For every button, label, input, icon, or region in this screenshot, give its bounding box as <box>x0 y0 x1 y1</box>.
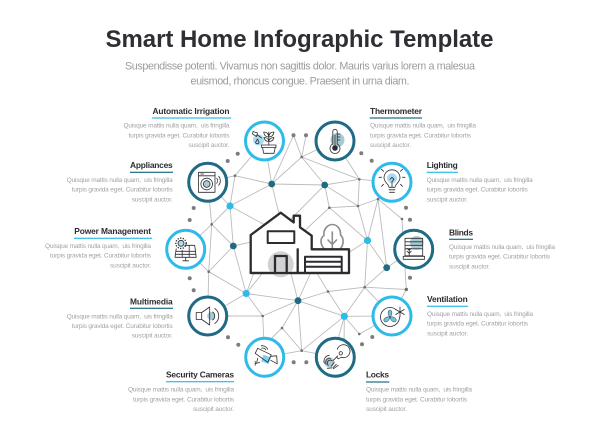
panel: appliances <box>67 160 227 203</box>
text block: turpis gravida eget. Curabitur lobortis <box>128 132 230 139</box>
panel: lighting <box>373 160 533 203</box>
underline <box>370 117 422 119</box>
tree <box>321 224 343 248</box>
icon: key and fingerprint <box>324 345 350 369</box>
door highlight <box>268 251 294 277</box>
text block: suscipit auctor. <box>188 142 230 149</box>
heading: Appliances <box>130 160 173 170</box>
text block: turpis gravida eget. Curabitur lobortis <box>72 323 173 330</box>
ring <box>316 122 354 160</box>
panel: power management <box>45 226 205 269</box>
underline <box>166 381 234 382</box>
text block <box>45 243 152 269</box>
text block: suscipit auctor. <box>366 406 407 413</box>
icon: solar panel <box>175 238 196 261</box>
text block: Quisque mattis nulla quam, uis fringilla <box>67 177 173 184</box>
text block: turpis gravida eget. Curabitur lobortis <box>370 132 472 139</box>
text block: Quisque mattis nulla quam, uis fringilla <box>366 387 472 394</box>
text block <box>124 123 230 149</box>
text block: suscipit auctor. <box>132 333 173 340</box>
ring <box>189 163 227 201</box>
panel: security cameras <box>128 338 284 413</box>
outer ring dots <box>188 133 412 364</box>
central house icon <box>251 213 349 277</box>
text block <box>427 177 533 203</box>
heading: Security Cameras <box>166 370 234 380</box>
subtitle: euismod, rhoncus congue. Praesent in urna diam. <box>190 75 410 87</box>
window <box>268 231 294 243</box>
text block <box>366 387 472 413</box>
icon: speaker <box>196 307 219 325</box>
text block: turpis gravida eget. Curabitur lobortis <box>449 254 551 261</box>
text block: turpis gravida eget. Curabitur lobortis <box>133 396 235 403</box>
ring <box>167 230 205 268</box>
text block: suscipit auctor. <box>449 263 490 270</box>
heading: Thermometer <box>370 106 423 116</box>
icon: window blinds <box>403 236 424 259</box>
underline <box>427 306 468 307</box>
heading: Lighting <box>427 160 458 170</box>
ring <box>246 338 284 376</box>
text block: Quisque mattis nulla quam, uis fringilla <box>45 243 151 250</box>
underline <box>152 117 231 119</box>
text block: turpis gravida eget. Curabitur lobortis <box>50 253 152 260</box>
ring <box>246 122 284 160</box>
text block: suscipit auctor. <box>370 142 411 149</box>
ring <box>316 338 354 376</box>
text block: turpis gravida eget. Curabitur lobortis <box>72 187 173 194</box>
heading: Power Management <box>74 226 151 236</box>
text block: Quisque mattis nulla quam, uis fringilla <box>449 244 555 251</box>
text block: suscipit auctor. <box>132 196 173 203</box>
panel: ventilation <box>373 294 533 337</box>
ring <box>395 230 433 268</box>
icon: light bulb <box>379 169 405 192</box>
underline <box>366 381 389 383</box>
underline <box>130 172 173 173</box>
panel: thermometer <box>316 106 476 160</box>
text block <box>67 313 173 340</box>
icon: security camera <box>255 346 277 365</box>
panel: locks <box>316 338 472 413</box>
title: Smart Home Infographic Template <box>106 26 494 53</box>
text block: suscipit auctor. <box>427 196 468 203</box>
subtitle <box>125 60 475 87</box>
text block: turpis gravida eget. Curabitur lobortis <box>427 187 528 194</box>
text block: Quisque mattis nulla quam, uis fringilla <box>427 177 533 184</box>
ring <box>373 297 411 335</box>
ring <box>373 163 411 201</box>
panel: automatic irrigation <box>124 106 284 160</box>
ring <box>189 297 227 335</box>
door <box>275 256 287 273</box>
network mesh <box>186 135 414 357</box>
underline <box>130 308 173 309</box>
text block: Quisque mattis nulla quam, uis fringilla <box>370 123 476 130</box>
text block: Quisque mattis nulla quam, uis fringilla <box>67 313 173 320</box>
heading: Blinds <box>449 227 473 237</box>
text block: Quisque mattis nulla quam, uis fringilla <box>427 311 533 318</box>
panel: multimedia <box>67 297 227 340</box>
text block: Quisque mattis nulla quam, uis fringilla <box>128 387 234 394</box>
network nodes <box>207 156 408 352</box>
garage door <box>305 257 342 273</box>
heading: Ventilation <box>427 294 468 304</box>
text block <box>449 244 555 270</box>
text block: suscipit auctor. <box>110 262 151 269</box>
text block <box>427 311 533 337</box>
text block: suscipit auctor. <box>427 330 468 337</box>
text block <box>370 123 476 149</box>
underline <box>74 238 152 239</box>
panel: blinds <box>395 227 555 270</box>
icon: fan and snowflake <box>380 307 405 326</box>
house body <box>251 213 349 273</box>
underline <box>449 239 473 240</box>
text block <box>67 177 173 203</box>
underline <box>427 172 458 173</box>
subtitle: Suspendisse potenti. Vivamus non sagittis dolor. Mauris varius lorem a malesua <box>125 60 475 72</box>
icon: washing machine <box>198 172 220 192</box>
text block <box>128 387 235 413</box>
heading: Automatic Irrigation <box>152 106 230 116</box>
icon: plant pot <box>252 132 276 153</box>
text block: suscipit auctor. <box>193 406 234 413</box>
heading: Locks <box>366 370 389 380</box>
text block: turpis gravida eget. Curabitur lobortis <box>427 321 529 328</box>
heading: Multimedia <box>130 297 173 307</box>
text block: turpis gravida eget. Curabitur lobortis <box>366 396 468 403</box>
text block: Quisque mattis nulla quam, uis fringilla <box>124 123 230 130</box>
icon: thermometer <box>330 129 344 153</box>
